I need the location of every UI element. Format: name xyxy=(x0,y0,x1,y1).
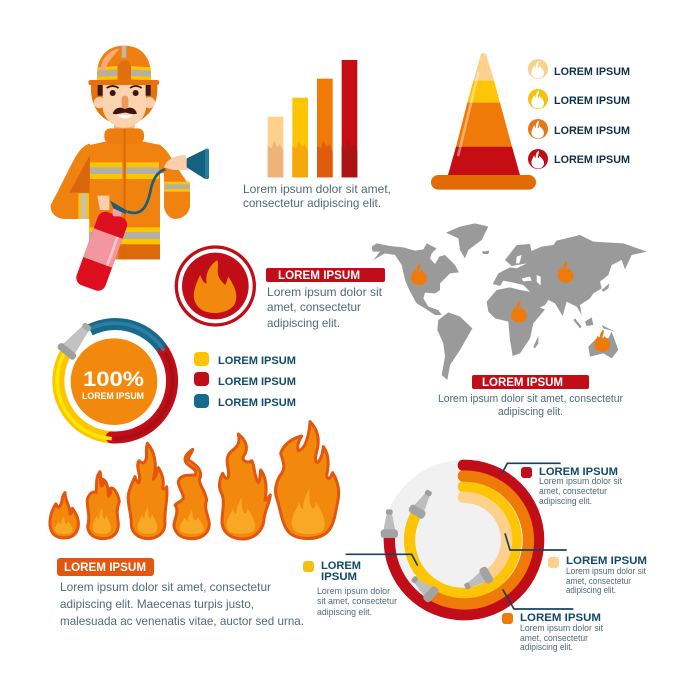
gauge value: LOREM IPSUM xyxy=(82,391,144,401)
emblem label and text xyxy=(266,268,385,330)
bar chart caption xyxy=(243,182,391,210)
label: peach ring: LOREM IPSUM xyxy=(566,555,647,567)
label: red ring: Lorem ipsum dolor sit xyxy=(539,476,622,487)
label: yellow ring: Lorem ipsum dolor xyxy=(317,586,390,597)
cone legend: LOREM IPSUM xyxy=(554,66,630,78)
bar chart xyxy=(268,60,357,177)
emblem label and text: LOREM IPSUM xyxy=(278,268,360,282)
concentric hose chart xyxy=(346,460,573,620)
label: yellow ring: sit amet, consectetur xyxy=(317,596,397,607)
emblem label and text: amet, consectetur xyxy=(267,300,361,314)
cone legend: LOREM IPSUM xyxy=(554,125,630,137)
jacket xyxy=(51,128,190,259)
gauge value: 100% xyxy=(83,368,144,391)
label: orange ring: Lorem ipsum dolor sit xyxy=(520,623,603,634)
label: peach ring: Lorem ipsum dolor sit xyxy=(566,566,646,577)
hose nozzle and hand xyxy=(127,149,209,213)
label: yellow ring: adipiscing elit. xyxy=(317,607,372,618)
label: red ring: amet, consectetur xyxy=(539,486,607,497)
flames paragraph: adipiscing elit. Maecenas turpis justo, xyxy=(60,597,254,611)
flames paragraph xyxy=(60,580,304,628)
label: peach ring: amet, consectetur xyxy=(566,576,631,587)
label: red ring: adipiscing elit. xyxy=(539,496,592,507)
bar chart caption: Lorem ipsum dolor sit amet, xyxy=(243,182,391,196)
label: peach ring xyxy=(548,555,647,596)
emblem label and text: adipiscing elit. xyxy=(267,316,340,330)
world map xyxy=(372,223,647,380)
head xyxy=(91,85,157,130)
flames label: LOREM IPSUM xyxy=(64,560,146,574)
label: yellow ring: LOREM xyxy=(321,560,361,572)
map fire markers xyxy=(411,260,610,352)
hose ring gauge 100% xyxy=(56,318,173,439)
label: orange ring xyxy=(502,612,603,653)
cone legend: LOREM IPSUM xyxy=(554,154,630,166)
gauge legend xyxy=(194,352,296,409)
gauge legend: LOREM IPSUM xyxy=(218,397,296,409)
map label xyxy=(438,375,623,418)
fire emblem xyxy=(176,247,254,325)
map label: LOREM IPSUM xyxy=(482,375,563,389)
label: orange ring: amet, consectetur xyxy=(520,633,588,644)
map label: adipiscing elit. xyxy=(498,406,563,418)
fire extinguisher xyxy=(74,196,129,293)
traffic cone xyxy=(431,53,536,190)
bar chart caption: consectetur adipiscing elit. xyxy=(243,196,381,210)
map label: Lorem ipsum dolor sit amet, consectetur xyxy=(438,393,623,405)
six flames row xyxy=(50,422,339,539)
cone legend: LOREM IPSUM xyxy=(554,95,630,107)
firefighter with extinguisher xyxy=(51,46,209,293)
label: yellow ring: IPSUM xyxy=(321,571,357,583)
label: orange ring: LOREM IPSUM xyxy=(520,612,601,624)
flames label xyxy=(57,558,154,576)
label: red ring xyxy=(521,466,622,507)
gauge value xyxy=(82,368,144,401)
label: orange ring: adipiscing elit. xyxy=(520,642,573,653)
label: peach ring: adipiscing elit. xyxy=(566,585,616,596)
helmet xyxy=(88,46,159,85)
hose nozzles xyxy=(381,486,494,604)
flames paragraph: Lorem ipsum dolor sit amet, consectetur xyxy=(60,580,271,594)
gauge legend: LOREM IPSUM xyxy=(218,376,296,388)
label: red ring: LOREM IPSUM xyxy=(539,466,618,478)
gauge legend: LOREM IPSUM xyxy=(218,355,296,367)
emblem label and text: Lorem ipsum dolor sit xyxy=(267,285,383,299)
cone legend xyxy=(528,59,630,169)
flames paragraph: malesuada ac venenatis vitae, auctor sed urna. xyxy=(60,614,304,628)
label: yellow ring xyxy=(303,560,397,618)
